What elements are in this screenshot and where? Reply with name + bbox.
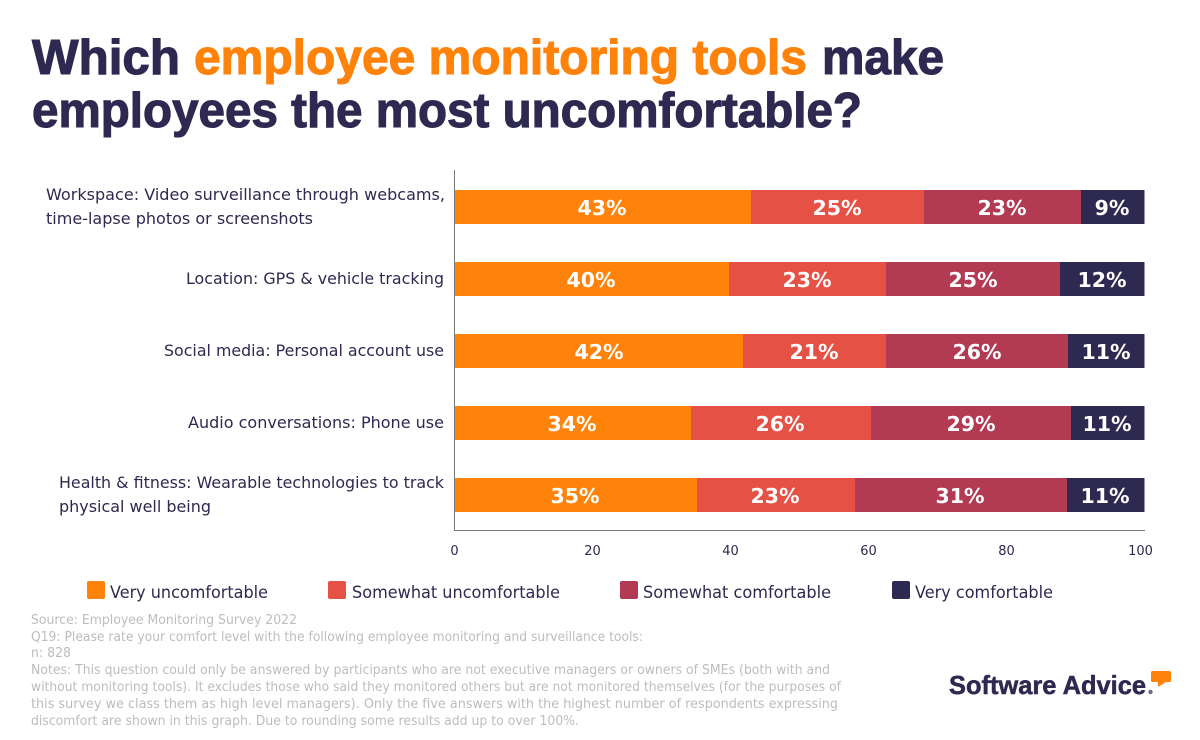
bar: location: 23%	[782, 268, 832, 292]
bar: audio conversations: 34%	[547, 412, 597, 436]
source and notes: this survey we class them as high level managers). Only the five answers with the highest number of respondents expressing	[31, 697, 838, 712]
category labels	[46, 185, 445, 516]
legend	[87, 581, 1053, 603]
x axis tick labels: 20	[584, 544, 601, 559]
source and notes: Notes: This question could only be answered by participants who are not executive managers or owners of SMEs (both with and	[31, 663, 830, 678]
bar: workspace: 25%	[812, 196, 862, 220]
title: Which	[32, 31, 180, 85]
bar: social media: 11%	[1081, 340, 1131, 364]
source and notes: Source: Employee Monitoring Survey 2022	[31, 613, 297, 628]
bar: location	[455, 262, 1144, 296]
source and notes: n: 828	[31, 646, 71, 661]
source and notes	[31, 613, 841, 729]
icon: orange speech bubble	[1151, 671, 1171, 687]
title	[32, 31, 944, 138]
category labels: Health & fitness: Wearable technologies to track	[59, 473, 445, 492]
source and notes: Q19: Please rate your comfort level with the following employee monitoring and surveillance tools:	[31, 630, 643, 645]
x axis tick labels: 60	[860, 544, 877, 559]
bar: health and fitness: 23%	[750, 484, 800, 508]
legend item: somewhat comfortable: Somewhat comfortable	[643, 583, 831, 603]
source and notes: without monitoring tools). It excludes those who said they monitored others but are not monitored themselves (for the purposes of	[31, 680, 841, 695]
title: employees the most uncomfortable?	[32, 84, 862, 138]
legend item: somewhat uncomfortable: Somewhat uncomfortable	[352, 583, 560, 603]
bar: location: 40%	[566, 268, 616, 292]
category labels: Social media: Personal account use	[164, 341, 444, 360]
axes	[454, 170, 1145, 531]
x axis tick labels: 80	[998, 544, 1015, 559]
x axis tick labels: 0	[450, 544, 459, 559]
category labels: Location: GPS & vehicle tracking	[186, 269, 444, 288]
legend item: very comfortable: Very comfortable	[915, 583, 1053, 603]
bar: social media	[455, 334, 1144, 368]
logo: Software Advice: Software Advice	[949, 670, 1146, 700]
bar: workspace: 9%	[1095, 196, 1129, 220]
bar: workspace: 43%	[577, 196, 627, 220]
bar chart	[46, 170, 1153, 559]
title: employee monitoring tools	[194, 31, 807, 85]
category labels: physical well being	[59, 497, 211, 516]
category labels: time-lapse photos or screenshots	[46, 209, 313, 228]
bar: health and fitness	[455, 478, 1144, 512]
category labels: Audio conversations: Phone use	[188, 413, 444, 432]
bar: audio conversations: 29%	[946, 412, 996, 436]
bar: location: 12%	[1077, 268, 1127, 292]
category labels: Workspace: Video surveillance through webcams,	[46, 185, 445, 204]
bar: workspace: 23%	[977, 196, 1027, 220]
bar: social media: 21%	[789, 340, 839, 364]
bar: health and fitness: 31%	[935, 484, 985, 508]
title: make	[822, 31, 944, 85]
x axis tick labels	[450, 544, 1153, 559]
bar: audio conversations: 26%	[755, 412, 805, 436]
bar: audio conversations: 11%	[1082, 412, 1132, 436]
bar: social media: 42%	[574, 340, 624, 364]
source and notes: discomfort are shown in this graph. Due to rounding some results add up to over 100%.	[31, 714, 579, 729]
bar: social media: 26%	[952, 340, 1002, 364]
bar: audio conversations	[455, 406, 1144, 440]
bar: workspace	[455, 190, 1144, 224]
bar: health and fitness: 11%	[1080, 484, 1130, 508]
bar: location: 25%	[948, 268, 998, 292]
x axis tick labels: 40	[722, 544, 739, 559]
legend item: very uncomfortable: Very uncomfortable	[110, 583, 268, 603]
bar: health and fitness: 35%	[550, 484, 600, 508]
x axis tick labels: 100	[1128, 544, 1153, 559]
